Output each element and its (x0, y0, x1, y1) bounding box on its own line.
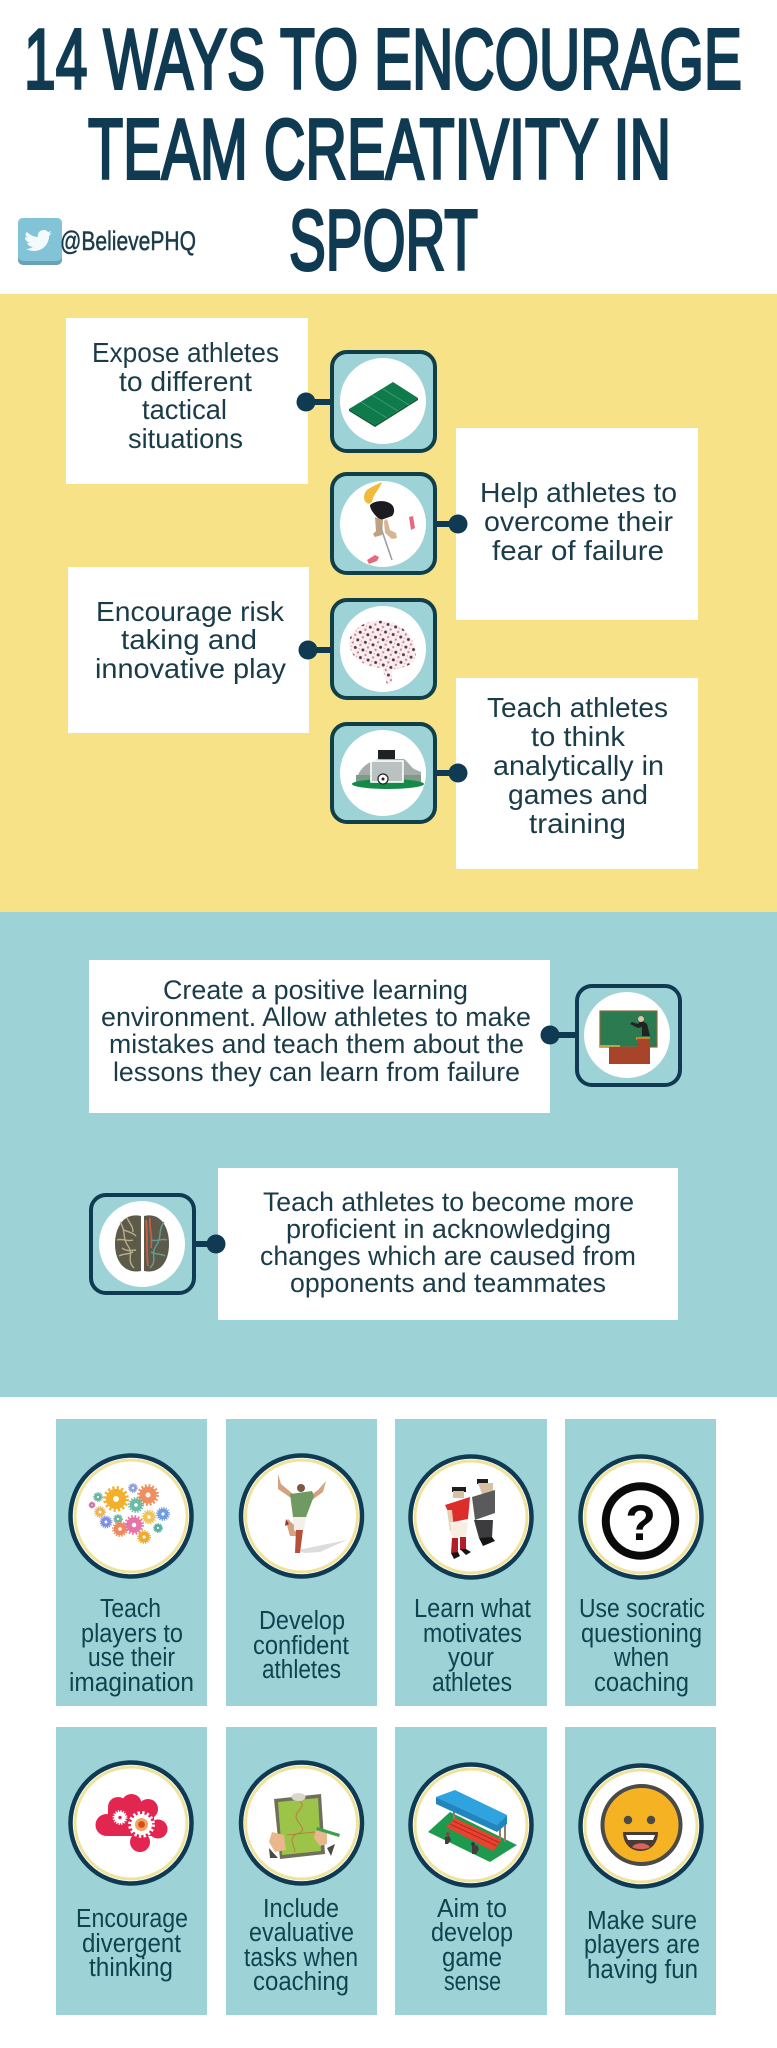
tip: expose athletes (66, 318, 308, 484)
tip: positive learning environment: lessons they can learn from failure (113, 1057, 520, 1087)
card: confident athletes: athletes (262, 1656, 341, 1684)
tip: acknowledging changes: Teach athletes to become more (263, 1187, 634, 1217)
card: confident athletes: Develop (259, 1607, 345, 1635)
tip: expose athletes: situations (128, 423, 243, 454)
tip: think analytically: Teach athletes (487, 692, 668, 723)
card: motivates: Learn what (414, 1595, 531, 1623)
card: divergent thinking: Encourage (76, 1905, 188, 1933)
icon: green pitch (332, 352, 435, 451)
icon: dotted brain (332, 600, 435, 698)
title (24, 12, 742, 288)
icon: question mark (580, 1456, 702, 1578)
tip: fear of failure: Help athletes to (480, 477, 677, 508)
card: motivates: athletes (432, 1669, 512, 1697)
card: game sense: Aim to (437, 1895, 507, 1923)
tip: acknowledging changes: changes which are caused from (260, 1241, 636, 1271)
tip: positive learning environment (89, 960, 550, 1113)
tip: positive learning environment: mistakes and teach them about the (109, 1029, 524, 1059)
twitter handle (18, 218, 196, 265)
card: game sense: sense (444, 1968, 501, 1996)
tip: think analytically: analytically in (493, 750, 664, 781)
icon: gears brain (70, 1456, 192, 1576)
icon: goal and scoreboard (332, 724, 435, 822)
tip: think analytically (456, 678, 698, 869)
tip: fear of failure (456, 428, 698, 620)
tip: acknowledging changes (218, 1168, 678, 1320)
panel: yellow section (0, 294, 777, 912)
card: socratic questioning: questioning (581, 1620, 702, 1648)
icon: tactics clipboard (241, 1762, 362, 1884)
tip: risk taking: taking and (121, 624, 257, 655)
icon: falling hockey player (332, 474, 435, 573)
card: evaluative tasks: coaching (253, 1968, 349, 1996)
tip: expose athletes: Expose athletes (92, 337, 279, 368)
card: divergent thinking: thinking (89, 1954, 173, 1982)
title: SPORT (289, 194, 478, 288)
card: motivates: your (448, 1644, 494, 1672)
card: socratic questioning (565, 1419, 716, 1706)
connector: fear of failure (435, 514, 468, 534)
card: confident athletes (226, 1419, 377, 1706)
tip: positive learning environment: Create a positive learning (163, 975, 468, 1005)
card: having fun: players are (584, 1931, 700, 1959)
icon: twitter bird (18, 218, 62, 265)
card: socratic questioning: when (613, 1644, 669, 1672)
connector: risk taking (298, 640, 332, 660)
icon: question mark: ? (625, 1495, 656, 1551)
card: game sense: game (442, 1944, 502, 1972)
tip: fear of failure: overcome their (484, 506, 673, 537)
tip: fear of failure: fear of failure (492, 535, 664, 566)
card: confident athletes: confident (253, 1632, 349, 1660)
card: use imagination (56, 1419, 207, 1706)
card: evaluative tasks: evaluative (249, 1919, 354, 1947)
tip: risk taking: Encourage risk (96, 596, 285, 627)
card: motivates (395, 1419, 547, 1706)
card: evaluative tasks (226, 1727, 377, 2015)
card: use imagination: imagination (69, 1669, 194, 1697)
card: game sense: develop (431, 1919, 513, 1947)
tip: acknowledging changes: proficient in acknowledging (286, 1214, 611, 1244)
tip: expose athletes: tactical (142, 394, 227, 425)
card: use imagination: use their (88, 1644, 175, 1672)
panel: teal section (0, 912, 777, 1397)
tip: risk taking (68, 567, 309, 733)
card: socratic questioning: Use socratic (579, 1595, 705, 1623)
card: game sense (395, 1727, 547, 2015)
tip: expose athletes: to different (119, 366, 252, 397)
card: use imagination: players to (81, 1620, 183, 1648)
card: having fun: Make sure (587, 1907, 697, 1935)
connector: positive learning environment (540, 1026, 576, 1044)
tip: acknowledging changes: opponents and teammates (290, 1268, 606, 1298)
tip: think analytically: games and (508, 779, 648, 810)
card: divergent thinking (56, 1727, 207, 2015)
tip: positive learning environment: environment. Allow athletes to make (101, 1002, 531, 1032)
icon: celebrating player (241, 1456, 362, 1576)
card: use imagination: Teach (100, 1595, 161, 1623)
icon: brain scan (91, 1195, 194, 1293)
icon: teacher at chalkboard (577, 986, 680, 1085)
twitter handle: @BelievePHQ (60, 226, 196, 256)
card: having fun (565, 1727, 716, 2015)
icon: red cloud brain (70, 1762, 192, 1884)
tip: risk taking: innovative play (95, 653, 286, 684)
connector: expose athletes (296, 392, 332, 412)
tip: think analytically: to think (531, 721, 626, 752)
icon: player and coach (410, 1456, 532, 1578)
card: divergent thinking: divergent (82, 1930, 181, 1958)
card: socratic questioning: coaching (594, 1669, 689, 1697)
connector: acknowledging changes (194, 1234, 226, 1254)
icon: dugout (410, 1764, 532, 1886)
card: motivates: motivates (423, 1620, 522, 1648)
icon: smiley face (580, 1766, 702, 1886)
connector: think analytically (435, 764, 468, 782)
card: evaluative tasks: Include (263, 1895, 339, 1923)
tip: think analytically: training (529, 808, 626, 839)
card: having fun: having fun (587, 1956, 698, 1984)
card: evaluative tasks: tasks when (244, 1944, 358, 1972)
